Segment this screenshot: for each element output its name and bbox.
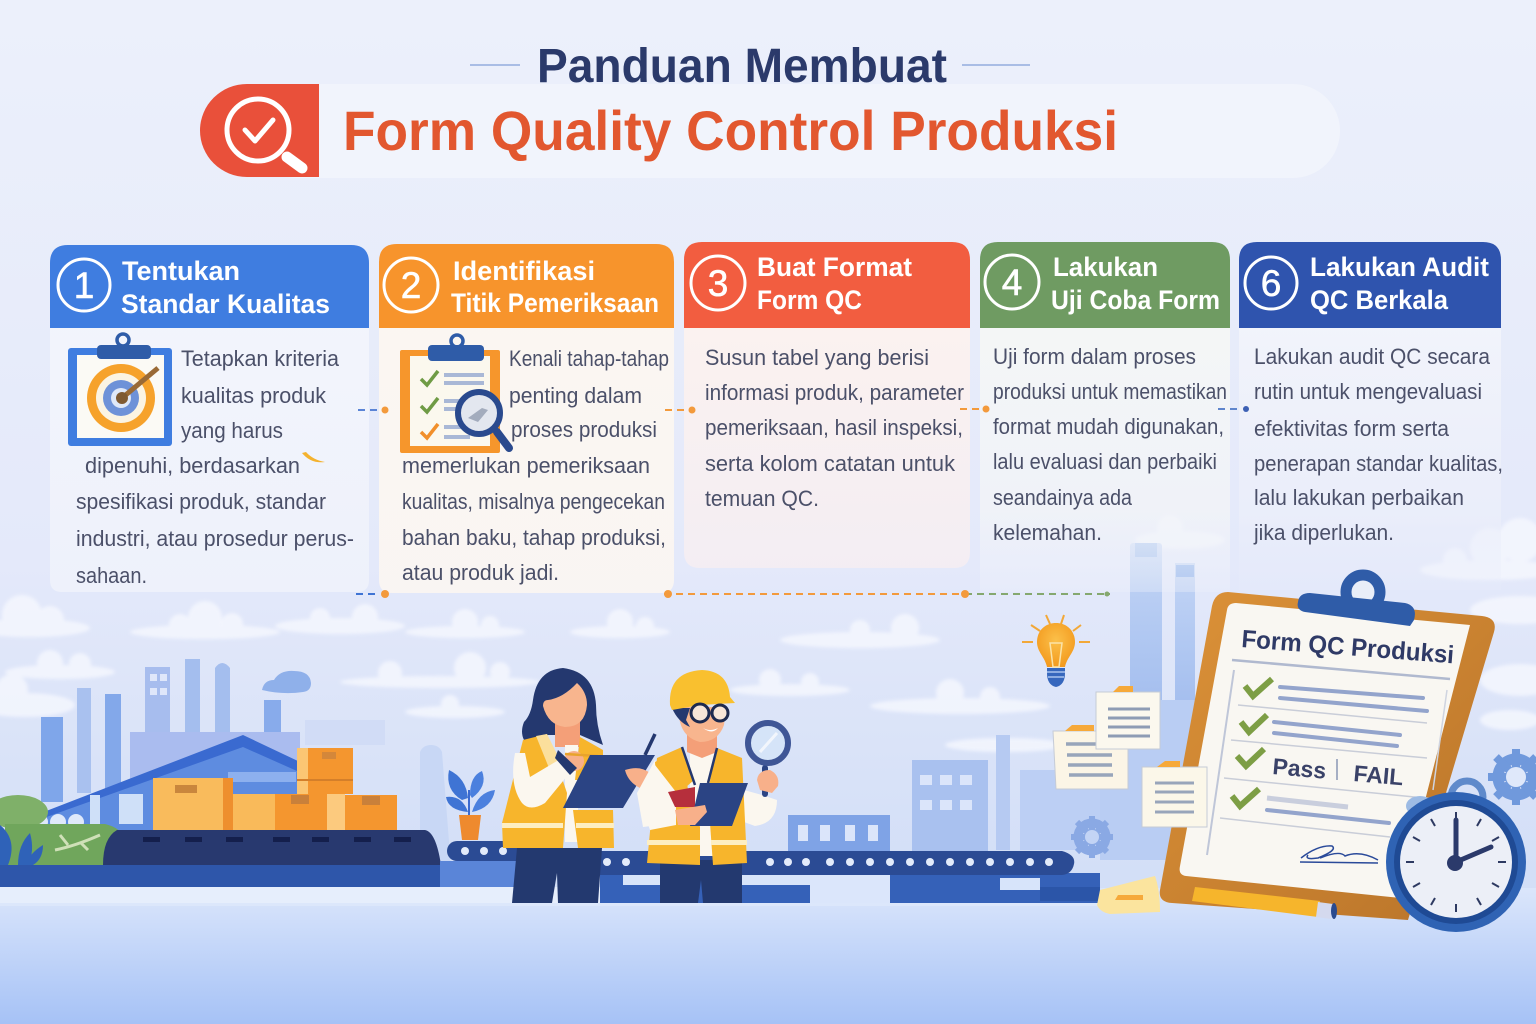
panel: step 3 xyxy=(684,242,970,568)
boxes xyxy=(153,748,397,830)
factory skyline left xyxy=(41,659,452,880)
step 2 header: Titik Pemeriksaan xyxy=(451,288,659,318)
step 6 header: Lakukan Audit xyxy=(1310,252,1489,282)
step 1 text: yang harus xyxy=(181,418,283,443)
step 4 header: Uji Coba Form xyxy=(1051,285,1220,315)
conveyor right xyxy=(447,841,1074,875)
step 1 header: Standar Kualitas xyxy=(121,289,330,319)
title top line: Panduan Membuat xyxy=(537,40,947,93)
icon: clipboard magnifier xyxy=(400,335,509,453)
step 4 text: lalu evaluasi dan perbaiki xyxy=(993,449,1217,474)
panel: step 2 xyxy=(379,244,674,593)
clouds backdrop xyxy=(0,515,1536,752)
step 2 text: kualitas, misalnya pengecekan xyxy=(402,489,665,514)
step 3 text: temuan QC. xyxy=(705,486,819,511)
step 3 header: Form QC xyxy=(757,285,862,315)
step 2 text: bahan baku, tahap produksi, xyxy=(402,525,666,550)
clipboard form QC: FAIL xyxy=(1353,760,1404,790)
step 2 text: penting dalam xyxy=(509,383,642,408)
woman trousers xyxy=(512,848,602,903)
step 1 text: sahaan. xyxy=(76,563,147,588)
step 4 text xyxy=(993,344,1227,545)
step 2 text: Kenali tahap-tahap xyxy=(509,346,669,371)
factory skyline right xyxy=(788,543,1210,860)
panel: step 1 xyxy=(50,245,369,592)
step 4 text: format mudah digunakan, xyxy=(993,414,1224,439)
ground band xyxy=(0,861,1100,906)
step 1 header xyxy=(50,245,369,328)
step 6 text: jika diperlukan. xyxy=(1253,520,1394,545)
step 1 text: industri, atau prosedur perus- xyxy=(76,526,354,551)
step 3 text: informasi produk, parameter xyxy=(705,380,964,405)
step 2 text: proses produksi xyxy=(511,417,657,442)
step 4 text: produksi untuk memastikan xyxy=(993,379,1227,404)
step 6 header: 6 xyxy=(1261,263,1281,304)
title banner: Form Quality Control Produksi xyxy=(343,99,1118,162)
document stack xyxy=(1053,686,1207,827)
step 6 text: Lakukan audit QC secara xyxy=(1254,344,1491,369)
stopwatch xyxy=(1386,781,1526,932)
step 6 text: efektivitas form serta xyxy=(1254,416,1450,441)
panel: step 6 xyxy=(1239,242,1503,590)
step 3 text: pemeriksaan, hasil inspeksi, xyxy=(705,415,963,440)
man inspector xyxy=(637,670,788,903)
step 3 text xyxy=(705,345,964,511)
step 1 text: kualitas produk xyxy=(181,383,327,408)
grass and shrub xyxy=(0,795,125,866)
step 1 text: spesifikasi produk, standar xyxy=(76,489,326,514)
clipboard form QC xyxy=(1160,575,1495,920)
step 2 text: atau produk jadi. xyxy=(402,560,559,585)
step 2 text xyxy=(402,346,669,585)
plant xyxy=(446,770,495,840)
step 6 header xyxy=(1239,242,1501,328)
step 2 header xyxy=(379,244,674,328)
connector lines xyxy=(356,406,1249,598)
icon: gear middle xyxy=(1071,816,1113,858)
step 2 text: memerlukan pemeriksaan xyxy=(402,453,650,478)
panel: step 4 xyxy=(980,242,1230,592)
step 4 text: seandainya ada xyxy=(993,485,1133,510)
step 4 header: Lakukan xyxy=(1053,252,1158,282)
icon: clipboard target xyxy=(68,334,172,446)
step 1 header: 1 xyxy=(74,265,94,306)
step 3 header: 3 xyxy=(708,263,728,304)
step 4 text: kelemahan. xyxy=(993,520,1102,545)
woman inspector xyxy=(502,668,655,903)
step 6 text: lalu lakukan perbaikan xyxy=(1254,485,1464,510)
icon: light bulb xyxy=(1022,615,1090,687)
warehouse xyxy=(10,735,300,832)
step 4 header: 4 xyxy=(1002,262,1022,303)
icon: magnifier check xyxy=(200,84,319,177)
man trousers xyxy=(660,860,742,903)
step 4 header xyxy=(980,242,1230,328)
step 3 header: Buat Format xyxy=(757,252,912,282)
step 1 text: Tetapkan kriteria xyxy=(181,346,340,371)
step 2 header: Identifikasi xyxy=(453,256,595,286)
step 1 text xyxy=(76,346,354,588)
icon: gear right xyxy=(1488,749,1536,805)
floor xyxy=(0,888,1536,1024)
step 6 header: QC Berkala xyxy=(1310,285,1449,315)
step 6 text: rutin untuk mengevaluasi xyxy=(1254,379,1482,404)
step 3 header xyxy=(684,242,970,328)
pencil xyxy=(1192,887,1337,919)
step 3 text: Susun tabel yang berisi xyxy=(705,345,929,370)
title banner xyxy=(200,84,1340,178)
step 1 text: dipenuhi, berdasarkan xyxy=(85,453,300,478)
step 6 text xyxy=(1253,344,1503,545)
step 6 text: penerapan standar kualitas, xyxy=(1254,451,1503,476)
step 2 header: 2 xyxy=(401,265,421,306)
clipboard clip xyxy=(1298,575,1415,626)
sticky note xyxy=(1097,876,1160,914)
step 1 header: Tentukan xyxy=(122,256,240,286)
step 4 text: Uji form dalam proses xyxy=(993,344,1196,369)
clipboard form QC: Pass xyxy=(1272,753,1327,784)
dark conveyor left xyxy=(103,830,441,865)
clipboard heading: Form QC Produksi xyxy=(1241,625,1455,669)
step 3 text: serta kolom catatan untuk xyxy=(705,451,956,476)
